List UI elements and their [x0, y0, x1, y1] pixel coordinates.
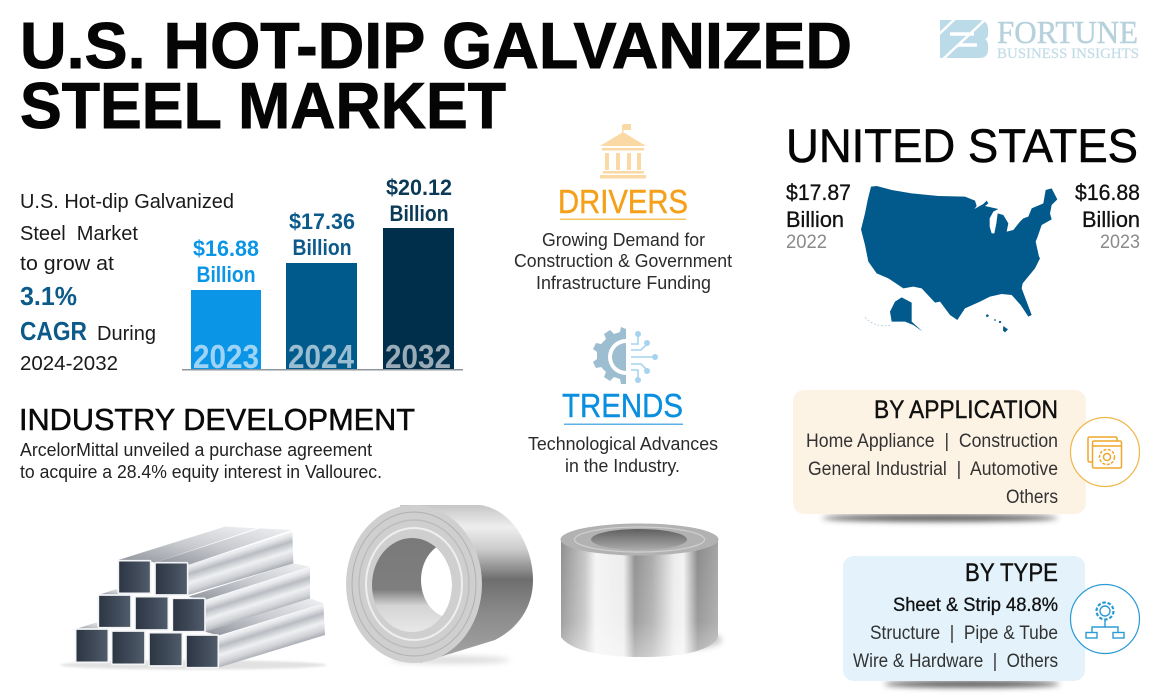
logo: Fortune Business Insights	[936, 14, 1139, 62]
bar 2023	[191, 236, 261, 375]
text block: CAGR summary: U.S. Hot-dip Galvanized	[20, 191, 234, 213]
trends block: in the Industry.	[565, 455, 680, 476]
image: stacked square steel tubes	[60, 527, 327, 670]
icon: gear and circuit	[593, 327, 658, 384]
trends block: TRENDS	[562, 387, 683, 424]
text block: industry development: to acquire a 28.4% equity interest in Vallourec.	[20, 462, 382, 482]
logo: Fortune Business Insights: BUSINESS INSIGHTS	[997, 46, 1139, 62]
bar 2023: Billion	[196, 262, 256, 287]
tube top surfaces	[76, 527, 323, 636]
bar 2024: 2024	[288, 338, 355, 375]
panel: by type: BY TYPE	[965, 559, 1058, 587]
stat: 2022 value: 2022	[786, 232, 827, 253]
text block: CAGR summary: 3.1%	[20, 281, 77, 311]
text block: industry development: ArcelorMittal unveiled a purchase agreement	[20, 440, 372, 460]
text block: CAGR summary: 2024-2032	[20, 353, 118, 375]
icon: government building	[600, 124, 646, 178]
bar 2024: $17.36	[289, 209, 355, 234]
icon: gear hierarchy	[1070, 584, 1140, 654]
stat: 2023 value	[1075, 180, 1140, 253]
drivers block: DRIVERS	[558, 183, 688, 220]
drivers block: Construction & Government	[514, 250, 732, 271]
panel: by type: Sheet & Strip 48.8%	[893, 595, 1058, 616]
panel: by type: Structure | Pipe & Tube	[870, 623, 1058, 644]
text block: industry development	[20, 440, 382, 482]
panel: by type	[843, 556, 1085, 688]
bar 2032: $20.12	[386, 175, 452, 200]
panel: by application: Others	[1006, 487, 1058, 508]
bar 2023: $16.88	[193, 236, 259, 261]
stat: 2022 value	[786, 180, 851, 253]
map: United States	[861, 186, 1057, 332]
text block: CAGR summary: During	[97, 323, 156, 345]
bar 2023: 2023	[193, 338, 259, 375]
bar 2024	[286, 209, 357, 375]
text block: CAGR summary: Steel Market	[20, 223, 138, 245]
drivers block: Infrastructure Funding	[536, 272, 711, 293]
title: U.S. HOT-DIP GALVANIZED	[20, 9, 852, 82]
bar 2024: Billion	[292, 235, 352, 260]
drivers block: Growing Demand for	[542, 229, 705, 250]
title	[20, 9, 852, 142]
icon: logo mark	[936, 17, 988, 61]
panel: by application: General Industrial | Automotive	[808, 459, 1058, 480]
tube sides	[188, 532, 325, 668]
stat: 2022 value: $17.87	[786, 180, 851, 205]
trends block	[528, 387, 718, 476]
stat: 2023 value: 2023	[1100, 232, 1140, 253]
text block: CAGR summary: CAGR	[20, 316, 87, 346]
tube ends	[76, 561, 218, 668]
stat: 2023 value: $16.88	[1075, 180, 1140, 205]
bar 2032: 2032	[385, 338, 451, 375]
title: STEEL MARKET	[20, 69, 506, 142]
panel: by application: BY APPLICATION	[874, 396, 1058, 424]
logo: Fortune Business Insights: FORTUNE	[997, 14, 1138, 50]
heading: united states: UNITED STATES	[786, 119, 1138, 172]
text block: CAGR summary: to grow at	[20, 253, 114, 275]
drivers block	[514, 183, 732, 293]
stat: 2023 value: Billion	[1082, 207, 1140, 232]
icon: application window and gear	[1070, 418, 1140, 486]
panel: by application	[793, 390, 1086, 522]
bar 2032: Billion	[390, 201, 448, 226]
heading: industry development: INDUSTRY DEVELOPMENT	[19, 402, 415, 437]
panel: by type: Wire & Hardware | Others	[853, 651, 1058, 672]
bar 2032	[383, 175, 454, 375]
image: upright steel coil	[560, 524, 722, 657]
text block: CAGR summary	[20, 191, 234, 375]
stat: 2022 value: Billion	[786, 207, 844, 232]
panel: by application: Home Appliance | Construction	[806, 431, 1058, 452]
bar chart: market size	[182, 175, 463, 375]
trends block: Technological Advances	[528, 433, 718, 454]
image: steel coil on edge	[346, 505, 533, 664]
